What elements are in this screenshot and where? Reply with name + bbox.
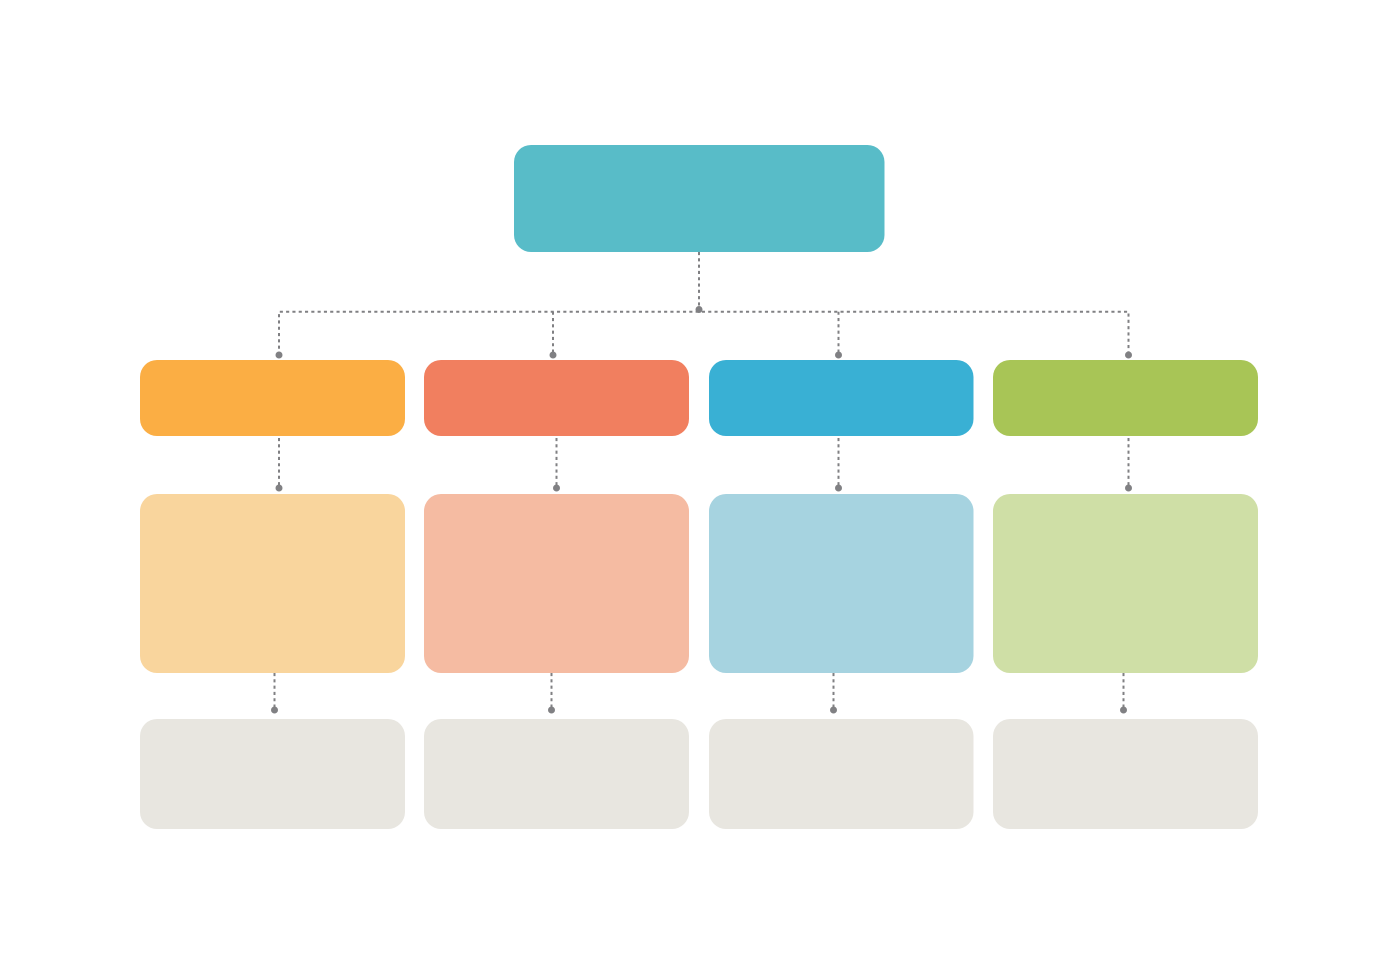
connectors: top to header row bbox=[279, 252, 1128, 355]
header box: red bbox=[424, 360, 689, 436]
bottom box 2 bbox=[424, 719, 689, 829]
connector dots: middle row bbox=[276, 484, 1132, 492]
top box bbox=[514, 145, 884, 252]
header box: orange bbox=[140, 360, 405, 436]
bottom box 3 bbox=[709, 719, 974, 829]
content box: light blue bbox=[709, 494, 974, 673]
header box: blue bbox=[709, 360, 974, 436]
header box: green bbox=[993, 360, 1258, 436]
connector dots: bottom row bbox=[271, 706, 1127, 714]
bottom box 1 bbox=[140, 719, 405, 829]
connector dots: top row bbox=[276, 306, 1132, 358]
content box: light green bbox=[993, 494, 1258, 673]
connectors: middle to bottom row bbox=[274, 673, 1124, 710]
bottom box 4 bbox=[993, 719, 1258, 829]
connectors: header to middle row bbox=[279, 438, 1128, 488]
content box: light orange bbox=[140, 494, 405, 673]
content box: light red bbox=[424, 494, 689, 673]
